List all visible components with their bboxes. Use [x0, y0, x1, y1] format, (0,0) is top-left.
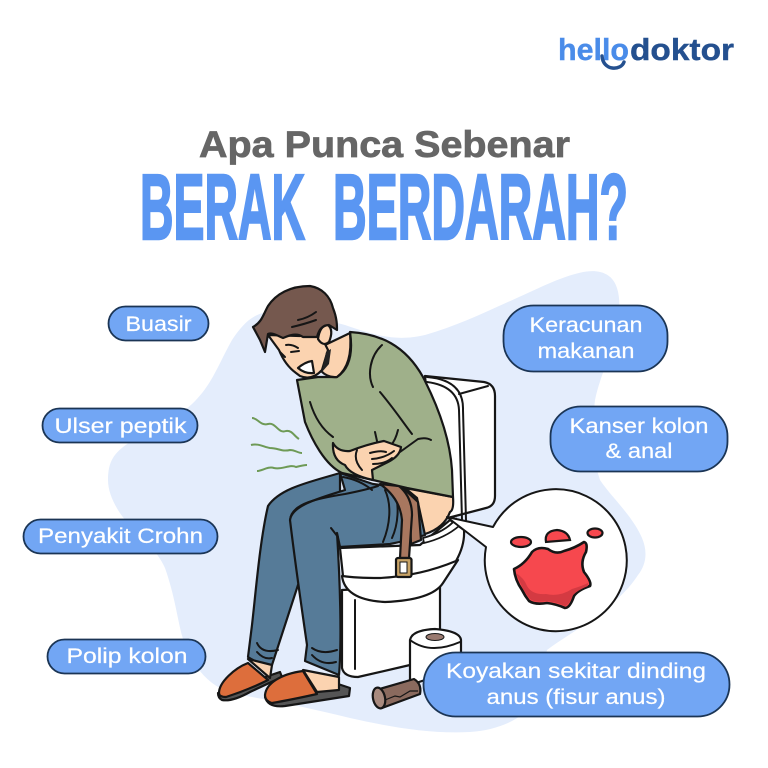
title line 1: Apa Punca Sebenar	[199, 124, 570, 165]
belt	[403, 488, 421, 544]
toilet roll	[410, 629, 461, 685]
toilet tank	[425, 376, 495, 520]
logo: hellodoktor	[558, 32, 734, 68]
label: Buasir	[108, 306, 208, 340]
logo: hellodoktor: doktor	[630, 32, 734, 67]
toilet bowl	[342, 560, 458, 602]
blood splat	[514, 542, 590, 608]
logo: hellodoktor: hello	[558, 32, 629, 67]
title line 2	[140, 155, 628, 259]
label: Keracunan makanan	[504, 306, 668, 372]
label: Koyakan sekitar dinding anus (fisur anus): anus (fisur anus)	[486, 686, 666, 709]
skin: lower back	[405, 488, 453, 534]
jeans: far leg	[248, 473, 340, 665]
illustration: man on toilet	[218, 286, 495, 710]
label: Buasir: Buasir	[126, 313, 192, 336]
toilet pedestal	[342, 585, 440, 677]
toilet seat	[340, 520, 464, 578]
jeans: near leg and hips	[290, 473, 425, 675]
label: Ulser peptik: Ulser peptik	[54, 415, 187, 438]
label: Keracunan makanan: makanan	[538, 340, 634, 363]
title line 2: BERAK	[140, 155, 305, 259]
slippers	[218, 672, 282, 700]
sweater	[297, 332, 453, 497]
eye and brow	[280, 345, 299, 357]
label: Keracunan makanan: Keracunan	[530, 314, 642, 337]
teeth	[298, 361, 314, 373]
label: Polip kolon	[48, 640, 206, 674]
label: Penyakit Crohn: Penyakit Crohn	[38, 525, 203, 548]
callout: blood in stool	[447, 489, 627, 631]
background blob	[108, 271, 645, 732]
label: Ulser peptik	[42, 408, 198, 442]
blood droplets	[511, 528, 602, 547]
poop log	[376, 679, 420, 708]
label: Kanser kolon & anal: Kanser kolon	[570, 415, 708, 438]
neck	[321, 333, 350, 377]
hair	[253, 286, 337, 352]
face	[268, 330, 328, 378]
label: Kanser kolon & anal: & anal	[606, 440, 672, 463]
label: Koyakan sekitar dinding anus (fisur anus): Koyakan sekitar dinding	[446, 660, 706, 683]
ear	[318, 325, 331, 344]
pain wavy lines	[251, 418, 307, 471]
label: Penyakit Crohn	[24, 520, 218, 554]
label: Polip kolon: Polip kolon	[66, 645, 188, 668]
label: Kanser kolon & anal	[550, 406, 728, 472]
label: Koyakan sekitar dinding anus (fisur anus)	[424, 652, 730, 716]
arm and hands	[333, 441, 401, 480]
